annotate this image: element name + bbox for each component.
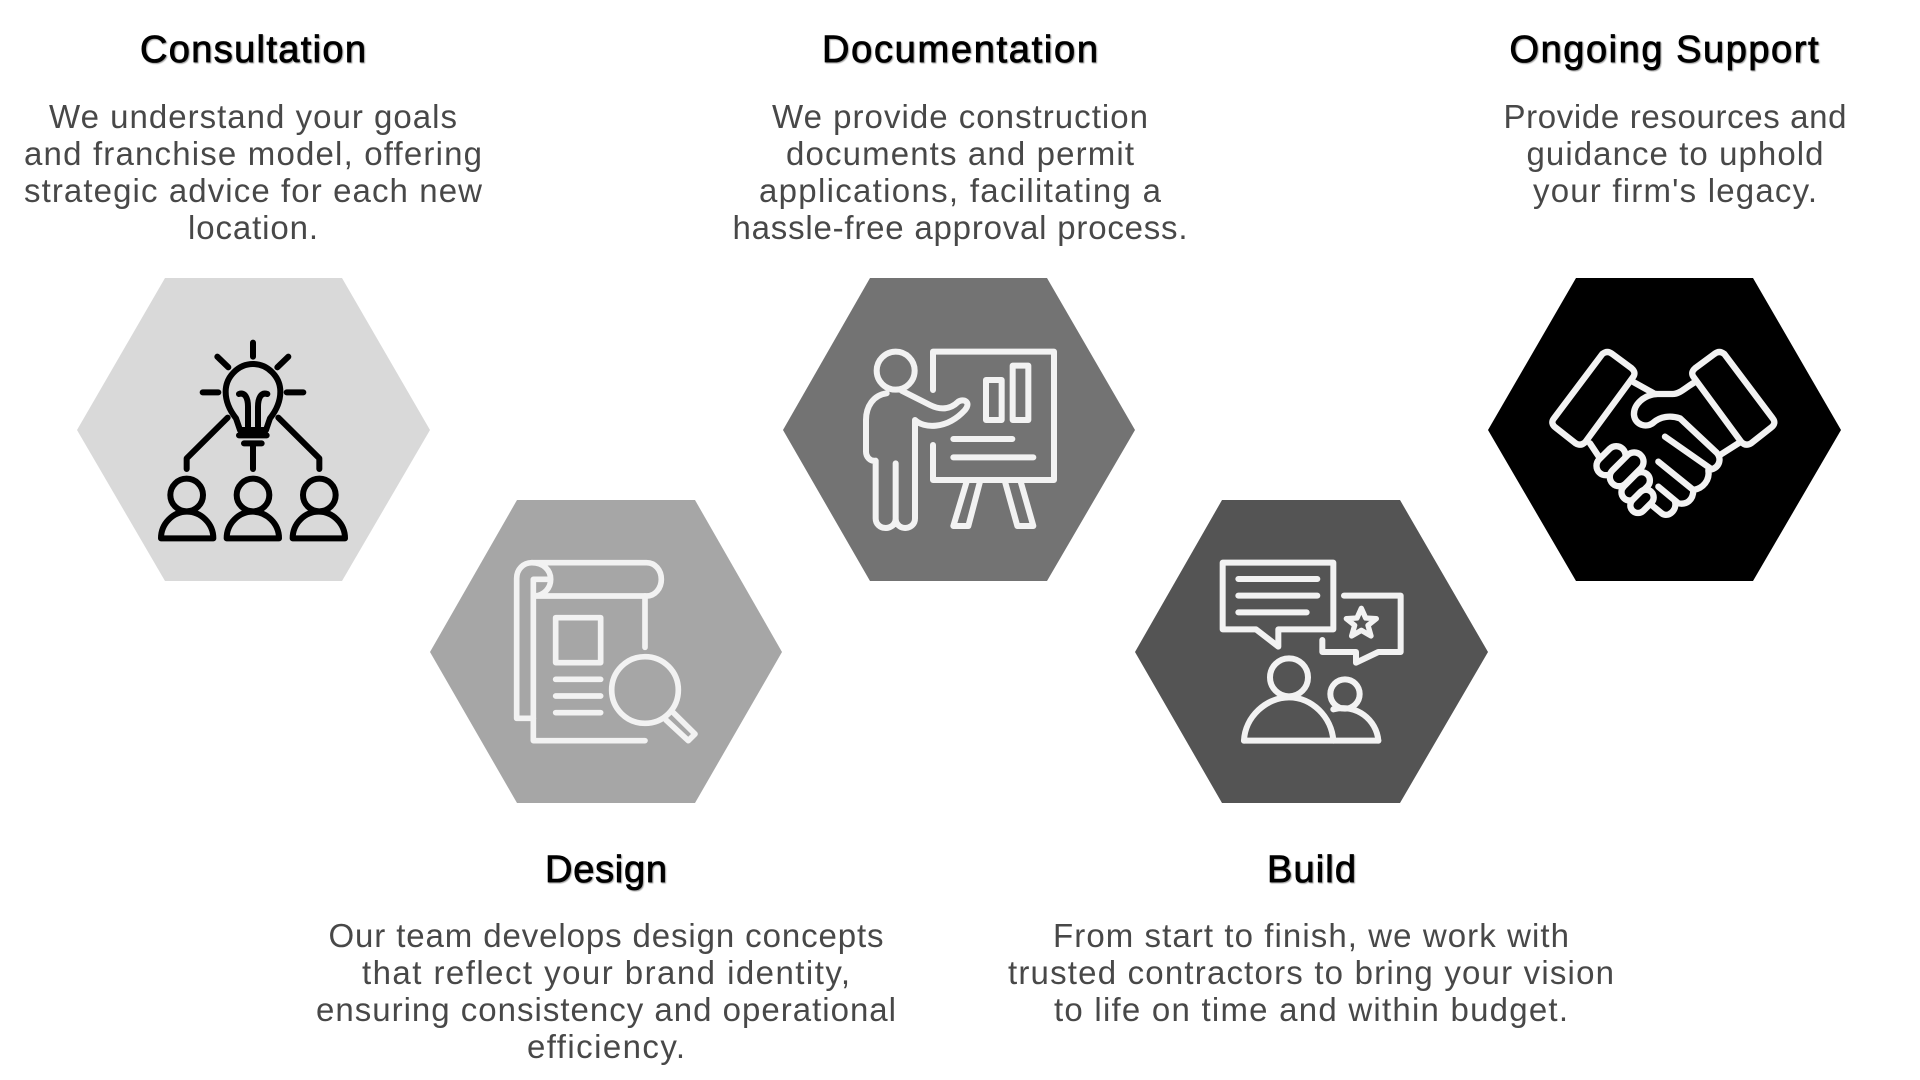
hexagon: build [1135, 500, 1488, 803]
text block: ongoing support description [1504, 98, 1846, 209]
text block: documentation description: applications, facilitating a [759, 172, 1162, 209]
text block: consultation description: strategic advice for each new [24, 172, 482, 209]
panel: ongoing support [1488, 29, 1846, 581]
text block: consultation description: and franchise model, offering [24, 135, 482, 172]
hexagon: design [430, 500, 782, 803]
text block: design description: that reflect your brand identity, [362, 954, 850, 991]
text block: consultation description: We understand your goals [49, 98, 457, 135]
icon: light bulb over three people [161, 343, 345, 538]
panel: documentation [732, 29, 1188, 581]
text block: ongoing support description: guidance to uphold [1526, 135, 1824, 172]
icon: two people with speech bubbles [1223, 563, 1401, 741]
text block: documentation description: hassle-free approval process. [732, 209, 1188, 246]
heading: consultation: Consultation [140, 29, 366, 71]
heading: design: Design [545, 849, 667, 891]
panel: consultation [24, 29, 482, 581]
icon: presenter at chart board [866, 352, 1054, 528]
text block: design description: Our team develops design concepts [328, 917, 884, 954]
text block: consultation description: location. [188, 209, 318, 246]
text block: build description: trusted contractors to bring your vision [1008, 954, 1614, 991]
text block: documentation description [732, 98, 1188, 246]
heading: build: Build [1267, 849, 1356, 891]
panel: build [1008, 500, 1614, 1028]
heading: documentation: Documentation [822, 29, 1098, 71]
hexagon: documentation [783, 278, 1135, 581]
text block: build description: to life on time and within budget. [1054, 991, 1568, 1028]
text block: documentation description: We provide construction [772, 98, 1148, 135]
hexagon: consultation [77, 278, 430, 581]
text block: build description [1008, 917, 1614, 1028]
heading: ongoing support: Ongoing Support [1510, 29, 1819, 71]
panel: design [316, 500, 896, 1065]
text block: consultation description [24, 98, 482, 246]
text block: design description: ensuring consistency and operational [316, 991, 896, 1028]
text block: documentation description: documents and permit [786, 135, 1134, 172]
text block: build description: From start to finish, we work with [1053, 917, 1569, 954]
text block: design description: efficiency. [527, 1028, 685, 1065]
icon: blueprint scroll with magnifier [517, 563, 695, 741]
text block: ongoing support description: your firm's legacy. [1533, 172, 1817, 209]
icon: handshake [1552, 352, 1774, 516]
text block: design description [316, 917, 896, 1065]
hexagon: ongoing support [1488, 278, 1841, 581]
text block: ongoing support description: Provide resources and [1504, 98, 1846, 135]
